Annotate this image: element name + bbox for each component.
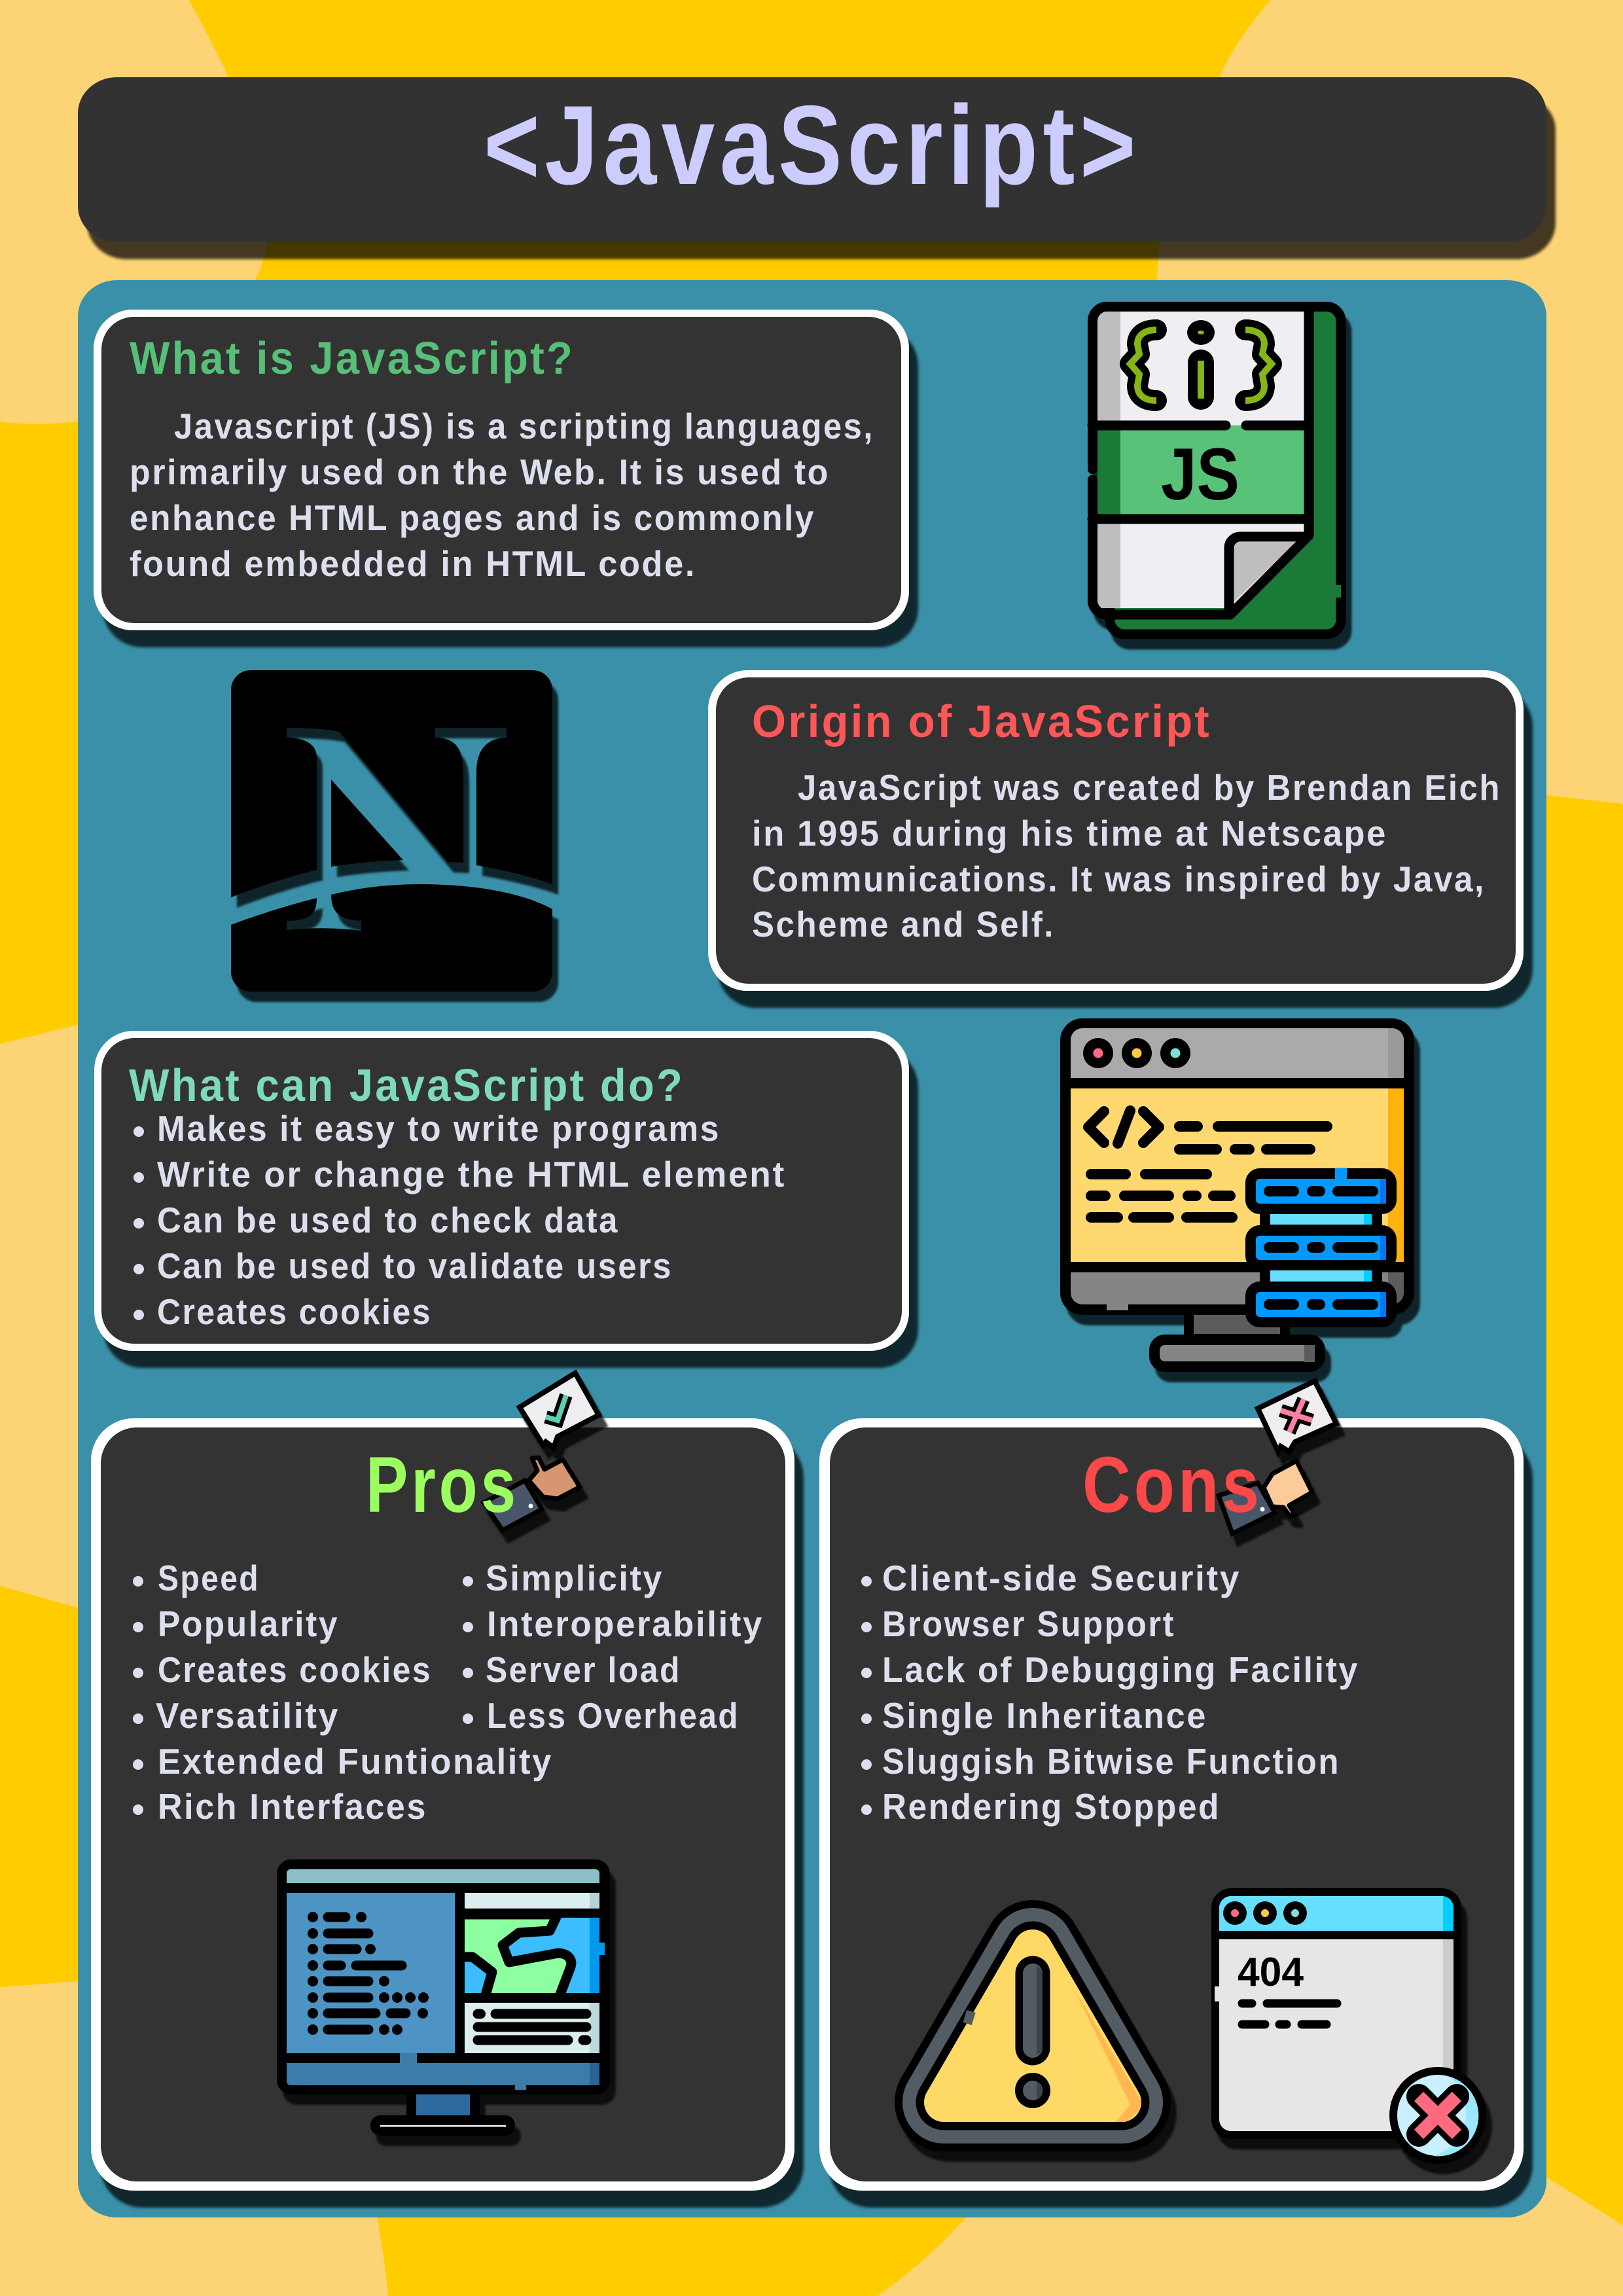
text block: origin: JavaScript was created by Brendan Eich (798, 767, 1501, 808)
panel: origin of JavaScript (708, 670, 1524, 991)
icon: 404 browser window with error badge: 404 (1238, 1950, 1304, 1995)
list: capabilities: Creates cookies (157, 1291, 432, 1332)
list: pros column 1: Versatility (156, 1695, 340, 1736)
list: pros column 2: Interoperability (487, 1604, 764, 1644)
list: cons: Lack of Debugging Facility (882, 1649, 1359, 1690)
list: cons: Sluggish Bitwise Function (882, 1741, 1340, 1782)
text block: definition: primarily used on the Web. It is used to (130, 452, 830, 492)
icon: warning triangle (944, 1949, 1141, 2122)
list: capabilities: Can be used to check data (157, 1200, 619, 1240)
list: capabilities: Can be used to validate users (157, 1246, 673, 1286)
icon: JS file (1092, 306, 1341, 634)
list: pros column 2: Less Overhead (487, 1695, 740, 1736)
heading: pros: Pros (366, 1440, 519, 1529)
text block: origin: in 1995 during his time at Netscape (752, 813, 1387, 853)
text block: origin: Communications. It was inspired by Java, (752, 859, 1486, 899)
icon: thumbs down with cross bubble (1219, 1381, 1336, 1534)
heading: origin: Origin of JavaScript (752, 696, 1211, 747)
icon: desktop with code and map (277, 1859, 610, 2136)
list: pros column 2 (463, 1558, 764, 1736)
list: pros column 1: Popularity (158, 1604, 339, 1644)
main teal panel (78, 280, 1546, 2217)
text block: origin: Scheme and Self. (752, 904, 1055, 944)
list: capabilities: Write or change the HTML element (157, 1154, 786, 1194)
icon: Netscape logo (231, 670, 552, 992)
icon: JS file: JS (1161, 433, 1240, 515)
list: pros column 1: Creates cookies (158, 1649, 432, 1690)
icon: thumbs up with check bubble (484, 1373, 599, 1530)
heading: what can JavaScript do: What can JavaScript do? (129, 1060, 685, 1111)
heading: cons: Cons (1082, 1440, 1262, 1529)
list: pros column 2: Server load (486, 1649, 681, 1690)
list: pros column 1: Rich Interfaces (158, 1786, 427, 1827)
list: capabilities (134, 1108, 786, 1332)
panel: what is JavaScript (94, 310, 909, 630)
text block: definition: enhance HTML pages and is commonly (130, 497, 815, 538)
panel: pros (91, 1373, 794, 2191)
list: capabilities: Makes it easy to write programs (157, 1108, 721, 1149)
list: cons (861, 1558, 1359, 1827)
list: pros column 1: Speed (158, 1558, 260, 1598)
panel: what can JavaScript do (94, 1031, 909, 1351)
list: cons: Browser Support (882, 1604, 1175, 1644)
title text: <JavaScript> (484, 82, 1141, 208)
list: pros column 1: Extended Funtionality (158, 1741, 553, 1782)
title bar (78, 77, 1546, 242)
text block: definition: Javascript (JS) is a scripting languages, (174, 406, 874, 446)
icon: code monitor with servers (1065, 1024, 1409, 1367)
icon: 404 browser window with error badge (1211, 1892, 1486, 2164)
list: cons: Client-side Security (882, 1558, 1241, 1598)
list: cons: Single Inheritance (882, 1695, 1207, 1736)
list: cons: Rendering Stopped (882, 1786, 1221, 1827)
text block: definition: found embedded in HTML code. (130, 543, 696, 584)
text block: definition (130, 406, 874, 584)
list: pros column 1 (133, 1558, 553, 1827)
text block: origin (752, 767, 1501, 944)
panel: cons (819, 1381, 1524, 2191)
list: pros column 2: Simplicity (486, 1558, 664, 1598)
heading: what is JavaScript: What is JavaScript? (130, 332, 575, 384)
